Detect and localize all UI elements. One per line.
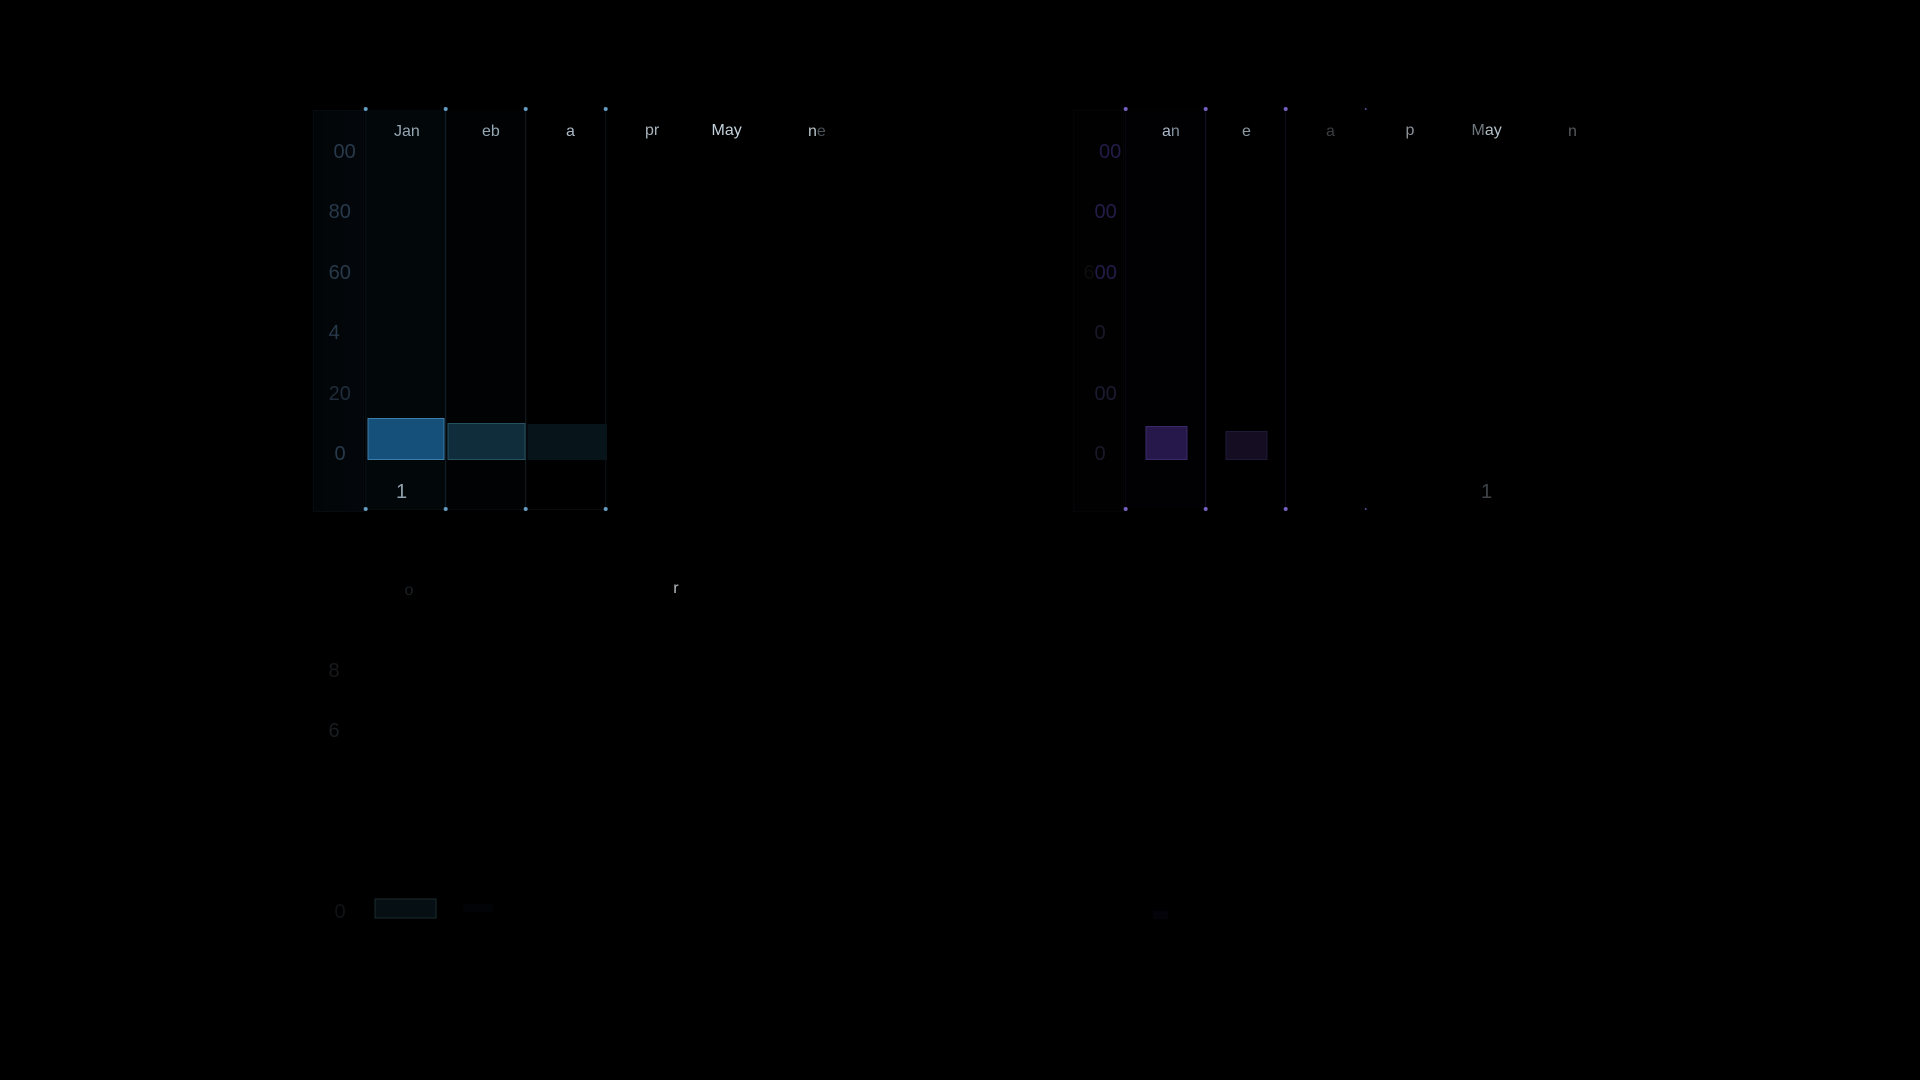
month labels: May <box>1472 122 1502 139</box>
y-axis labels <box>1084 141 1121 465</box>
month labels: a <box>1326 123 1335 140</box>
month labels: ne <box>808 123 826 140</box>
y-axis labels: 0 <box>1094 443 1106 465</box>
bar: March <box>528 424 607 460</box>
y-axis labels: 00 <box>1094 383 1117 405</box>
panel: lower-left fading chart <box>328 580 679 923</box>
y-axis labels: 60 <box>329 262 351 284</box>
month labels: o <box>404 582 414 599</box>
bar: January <box>375 899 436 918</box>
y-axis labels: 4 <box>329 322 340 344</box>
month labels: r <box>673 580 679 597</box>
handle dots <box>364 107 608 511</box>
january column shade <box>366 110 446 509</box>
month labels: p <box>1406 122 1414 139</box>
panel: lower-right trace label <box>1153 911 1168 919</box>
month labels: an <box>1162 123 1180 140</box>
y-axis column <box>314 110 364 512</box>
month labels: May <box>712 122 742 139</box>
y-axis labels: 00 <box>1094 201 1117 223</box>
y-axis labels: 0 <box>334 443 346 465</box>
month labels: a <box>566 123 575 140</box>
y-axis labels: 00 <box>334 141 356 163</box>
month labels <box>404 580 679 599</box>
y-axis labels <box>328 660 346 923</box>
y-axis labels: 80 <box>329 201 351 223</box>
y-axis labels: 8 <box>328 660 340 682</box>
month labels <box>394 122 826 140</box>
panel: top-left blue chart <box>314 107 826 512</box>
month labels: eb <box>482 123 500 140</box>
y-axis labels: 00 <box>1099 141 1121 163</box>
bar: February <box>463 904 493 912</box>
month labels: pr <box>645 122 660 139</box>
bar: February <box>1226 432 1267 460</box>
y-axis labels: 0 <box>334 901 346 923</box>
month labels: Jan <box>394 123 420 140</box>
month labels <box>1162 122 1577 140</box>
bar: February <box>448 424 525 460</box>
y-axis labels: 6 <box>328 720 340 742</box>
bar: January <box>368 418 444 460</box>
bar: January <box>1146 426 1187 460</box>
panel: top-right purple chart <box>1074 107 1577 512</box>
handle dots <box>1124 107 1367 511</box>
february column shade <box>446 110 526 509</box>
value label: 1 <box>396 481 407 503</box>
y-axis labels: 0 <box>1094 322 1106 344</box>
y-axis labels: 600 <box>1084 262 1117 284</box>
y-axis labels <box>329 141 356 465</box>
y-axis labels: 20 <box>329 383 351 405</box>
month labels: n <box>1568 123 1577 140</box>
axis column <box>1074 110 1124 512</box>
value label: 1 <box>1481 481 1492 503</box>
month labels: e <box>1242 123 1251 140</box>
